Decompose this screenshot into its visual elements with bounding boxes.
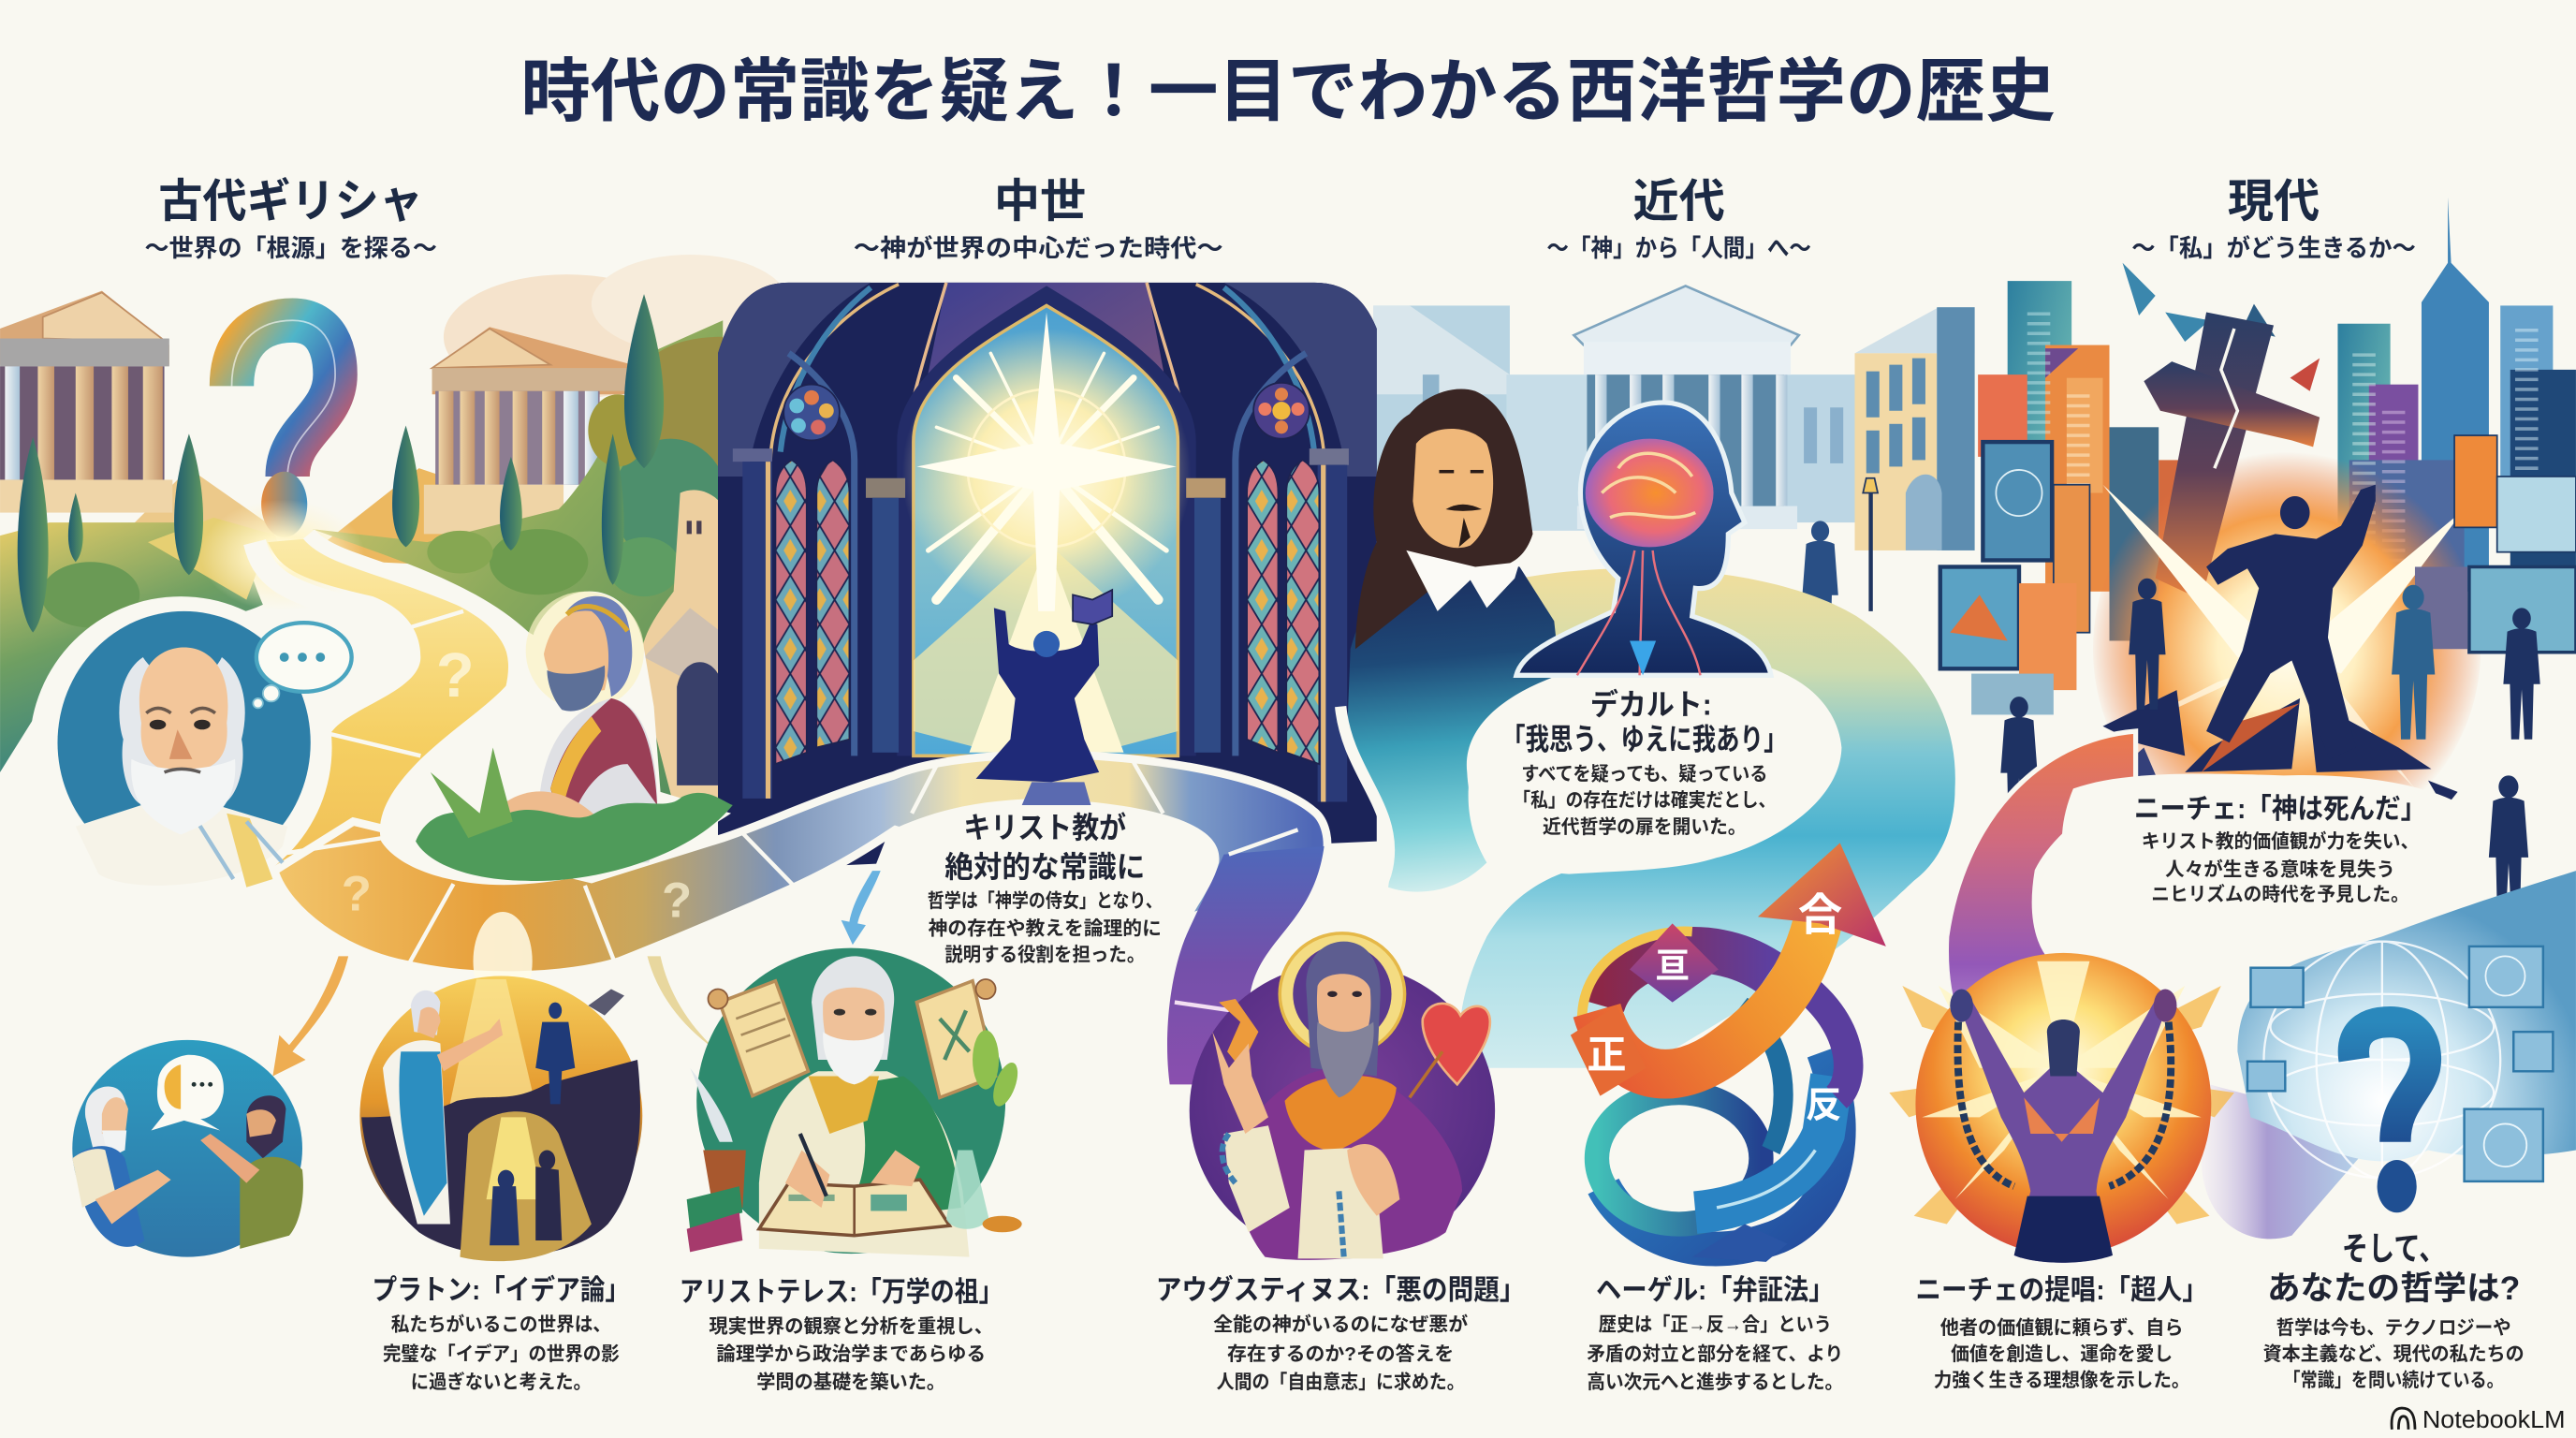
caption: Augustine: 全能の神がいるのになぜ悪が: [1213, 1313, 1468, 1336]
ground right: [313, 320, 723, 822]
road question marks: ?: [342, 866, 372, 921]
text block: Christianity: 神の存在や教えを論理的に: [929, 918, 1162, 940]
icon: large question mark: [232, 320, 335, 537]
heading: medieval: [854, 177, 1223, 262]
icon: blue question mark: [2353, 1022, 2425, 1212]
figure: man at the edge: [2000, 697, 2038, 829]
icon: Aristotle circle: [687, 948, 1022, 1257]
caption: Nietzsche overman: ニーチェの提唱:「超人」: [1915, 1275, 2208, 1306]
caption: your philosophy: 資本主義など、現代の私たちの: [2263, 1343, 2525, 1365]
caption: Augustine: 存在するのか?その答えを: [1227, 1343, 1454, 1365]
figure: bystander 1: [2129, 579, 2166, 710]
caption: Hegel: ヘーゲル:「弁証法」: [1596, 1275, 1835, 1306]
glowing cross: [916, 312, 1177, 611]
caption: Plato: 私たちがいるこの世界は、: [391, 1313, 611, 1336]
caption: Nietzsche overman: 価値を創造し、運命を愛し: [1951, 1343, 2173, 1365]
caption: Nietzsche overman: [1915, 1275, 2208, 1391]
caption: Plato: [373, 1274, 630, 1393]
vault: [914, 283, 1178, 447]
panel: final question backdrop: [2237, 871, 2576, 1212]
stained glass right: [1247, 383, 1319, 764]
text block: Nietzsche god is dead: キリスト教的価値観が力を失い、: [2142, 830, 2419, 853]
arrow: orange to dialogue circle: [272, 956, 348, 1077]
icon: Nietzsche overman circle: [1889, 953, 2234, 1263]
bushes: [416, 793, 733, 881]
icon: Socrates portrait: [30, 596, 332, 899]
arrow: cream to Aristotle: [648, 956, 718, 1051]
caption: Hegel: 歴史は「正→反→合」という: [1599, 1314, 1832, 1336]
caption: Augustine: 人間の「自由意志」に求めた。: [1217, 1372, 1465, 1393]
heading: early modern: ～「神」から「人間」へ～: [1546, 234, 1811, 262]
side columns: [733, 448, 1349, 801]
illustration: Descartes robe fading into teal: [1347, 550, 1560, 892]
text block: Christianity: 説明する役割を担った。: [944, 945, 1145, 966]
lamp post: [1863, 478, 1878, 611]
callout: white bubble around thinker: [380, 592, 731, 885]
caption: your philosophy: 哲学は今も、テクノロジーや: [2276, 1317, 2511, 1339]
ruin and cave: [640, 490, 733, 814]
callout: Descartes speech area: [1467, 654, 1841, 874]
road: Greek yellow section: [268, 539, 575, 986]
figure: man raging: [2206, 485, 2376, 759]
road question marks: ?: [436, 641, 475, 711]
road: teal section around Descartes: [1460, 568, 1955, 1068]
caption: Plato: に過ぎないと考えた。: [411, 1371, 592, 1393]
modern skyscrapers: [1978, 198, 2576, 640]
text block: Christianity: [928, 811, 1163, 966]
caption: your philosophy: あなたの哲学は?: [2267, 1270, 2520, 1307]
floor cracks: [2102, 690, 2458, 808]
caption: Nietzsche overman: 力強く生きる理想像を示した。: [1934, 1370, 2190, 1391]
road question marks: [342, 641, 692, 928]
panel: lavender tail: [2202, 1084, 2365, 1239]
text block: Descartes: 「私」の存在だけは確実だとし、: [1513, 790, 1776, 812]
road: purple descent: [1167, 846, 1325, 1084]
road question marks: ?: [662, 873, 692, 928]
screens: [2247, 946, 2553, 1181]
heading: ancient Greece: ～世界の「根源」を探る～: [145, 234, 437, 262]
caption: your philosophy: [2263, 1231, 2525, 1391]
text block: Christianity: 絶対的な常識に: [944, 850, 1145, 884]
hair: [567, 596, 632, 697]
toga: [76, 805, 287, 886]
spiral labels: 正: [1587, 1033, 1627, 1077]
light rays: [2037, 485, 2465, 788]
road: white border right: [309, 534, 516, 690]
rays: [929, 353, 1166, 600]
text block: Nietzsche god is dead: 人々が生きる意味を見失う: [2165, 858, 2395, 880]
icon: thought bubble: [253, 623, 352, 708]
caption: Augustine: [1156, 1275, 1526, 1393]
text block: Christianity: 哲学は「神学の侍女」となり、: [928, 890, 1163, 912]
panel: ancient Greece landscape: [0, 255, 788, 822]
ground left: [0, 522, 263, 772]
beard: [131, 759, 235, 835]
icon: allegory of the cave circle: [359, 976, 642, 1261]
caption: Aristotle: 現実世界の観察と分析を重視し、: [709, 1315, 993, 1337]
text block: Nietzsche god is dead: [2134, 794, 2426, 905]
body: [539, 698, 658, 862]
window strips: [2039, 312, 2526, 566]
screens: [1940, 435, 2576, 714]
icon: Hegel dialectic spiral: [1571, 843, 1886, 1262]
caption: Hegel: [1587, 1275, 1843, 1393]
icon: Augustine circle: [1190, 933, 1495, 1260]
callout: Christianity speech area: [855, 799, 1220, 1051]
stained glass left: [775, 385, 849, 764]
road: Nietzsche orange to purple: [1946, 731, 2136, 1068]
central arched window: [897, 286, 1196, 756]
glow at the road start: [200, 500, 365, 611]
illustration: Descartes portrait: [1355, 389, 1532, 649]
figure: man on right: [2489, 775, 2528, 917]
caption: Augustine: アウグスティヌス:「悪の問題」: [1156, 1275, 1526, 1306]
broken shards: [2123, 263, 2320, 391]
figure: bystander 2: [2392, 585, 2435, 740]
heading: ancient Greece: [145, 177, 437, 262]
icon: thinker figure: [416, 592, 733, 881]
heading: contemporary: ～「私」がどう生きるか～: [2131, 234, 2416, 262]
spiral labels: 反: [1806, 1085, 1841, 1125]
text block: Nietzsche god is dead: ニヒリズムの時代を予見した。: [2151, 883, 2409, 905]
panel: modern city and classic buildings: [1373, 198, 2576, 917]
caption: your philosophy: 「常識」を問い続けている。: [2284, 1370, 2504, 1391]
spiral labels: [1587, 890, 1842, 1125]
text block: Nietzsche god is dead: ニーチェ:「神は死んだ」: [2134, 794, 2426, 825]
temple left: [0, 291, 172, 513]
text block: Descartes: すべてを疑っても、疑っている: [1521, 764, 1767, 785]
outer rays: [1889, 986, 2234, 1224]
text block: Descartes: 「我思う、ゆえに我あり」: [1501, 722, 1788, 756]
panel: medieval cathedral: [718, 283, 1377, 871]
broken cross: [2144, 312, 2320, 600]
icon: dialogue circle: [72, 1040, 303, 1257]
hair tufts: [119, 657, 245, 805]
temple right: [424, 327, 633, 534]
road white curve: [1284, 707, 1389, 986]
heading: early modern: [1546, 177, 1811, 262]
spiral labels: 亘: [1655, 946, 1690, 985]
caption: your philosophy: そして、: [2342, 1231, 2445, 1268]
text block: Descartes: 近代哲学の扉を開いた。: [1543, 816, 1747, 838]
figure: monk kneeling with book: [976, 590, 1112, 805]
caption: Hegel: 矛盾の対立と部分を経て、より: [1587, 1343, 1843, 1365]
caption: Aristotle: [680, 1277, 1003, 1393]
caption: Hegel: 高い次元へと進歩するとした。: [1587, 1372, 1843, 1393]
face and bald dome: [139, 647, 227, 772]
text block: Christianity: キリスト教が: [963, 811, 1126, 844]
arrow: blue down to Aristotle: [842, 871, 881, 945]
caption: Plato: 完璧な「イデア」の世界の影: [383, 1343, 620, 1365]
spiral labels: 合: [1798, 890, 1842, 940]
cypress trees: [18, 437, 49, 633]
title: 時代の常識を疑え！一目でわかる西洋哲学の歴史: [520, 52, 2056, 130]
caption: Aristotle: 学問の基礎を築いた。: [756, 1372, 945, 1393]
text block: Descartes: デカルト:: [1590, 687, 1712, 721]
figure: man near lamp: [1802, 521, 1838, 649]
face: [544, 610, 608, 697]
heading: ancient Greece: 古代ギリシャ: [158, 177, 423, 227]
heading: medieval: ～神が世界の中心だった時代～: [854, 234, 1223, 262]
road: white border left: [255, 542, 404, 871]
icon: glow below road: [474, 912, 533, 1010]
heading: contemporary: [2131, 177, 2416, 262]
caption: Plato: プラトン:「イデア論」: [373, 1274, 630, 1306]
road: lower arc through medieval floor: [274, 755, 1327, 976]
road tile dividers: [278, 611, 1298, 1016]
logo: NotebookLM: NotebookLM: [2422, 1405, 2566, 1433]
figure: bystander 3: [2503, 608, 2540, 740]
caption: Aristotle: 論理学から政治学まであらゆる: [716, 1343, 986, 1365]
neoclassical temple: [1573, 286, 1799, 529]
callout: Nietzsche white area: [2062, 774, 2489, 929]
caption: Aristotle: アリストテレス:「万学の祖」: [680, 1277, 1003, 1308]
illustration: head silhouette with brain: [1516, 403, 1771, 675]
heading: medieval: 中世: [994, 177, 1086, 227]
heading: early modern: 近代: [1633, 177, 1725, 227]
heading: contemporary: 現代: [2228, 177, 2320, 227]
explosion glow: [2093, 448, 2481, 849]
tan building: [1854, 307, 1975, 550]
caption: Nietzsche overman: 他者の価値観に頼らず、自ら: [1940, 1317, 2183, 1339]
text block: Descartes: [1501, 687, 1788, 838]
